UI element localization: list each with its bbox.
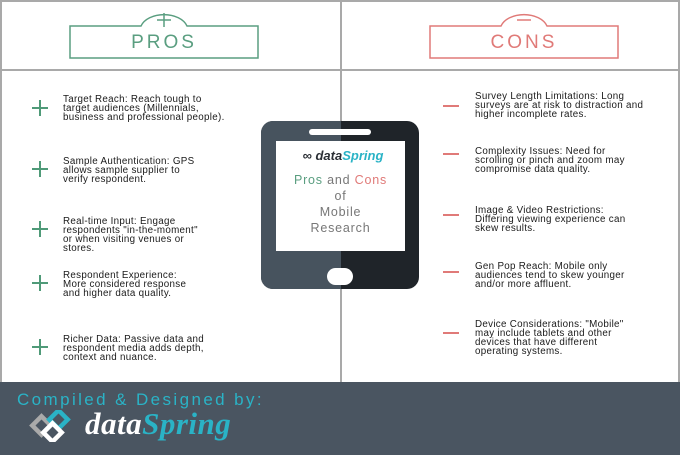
con 4: and/or more affluent. [475,279,572,290]
con 2 [443,146,625,175]
header: pros: PROS [131,32,197,53]
pro 2: Sample Authentication: GPS [63,156,194,167]
screen title: Mobile [320,205,361,219]
con 3: skew results. [475,223,536,234]
con 1 [443,91,643,120]
pro 3: or when visiting venues or [63,234,184,245]
con 3: Differing viewing experience can [475,214,625,225]
footer [0,382,680,455]
con 3 [443,205,625,234]
pro 1: business and professional people). [63,112,225,123]
pro 5 [32,334,204,363]
pro 5: Richer Data: Passive data and [63,334,204,345]
con 5: Device Considerations: "Mobile" [475,319,624,330]
screen logo: ∞ dataSpring [303,148,383,163]
header: cons: CONS [491,32,557,53]
pro 3: respondents "in-the-moment" [63,225,198,236]
con 2: Complexity Issues: Need for [475,146,606,157]
con 5: operating systems. [475,346,563,357]
screen title: Research [311,221,370,235]
con 1: higher incomplete rates. [475,109,587,120]
phone [261,121,419,289]
header: pros [69,13,259,59]
pro 4: More considered response [63,279,186,290]
pro 3 [32,216,198,254]
pro 3: stores. [63,243,95,254]
screen title [294,173,387,235]
pro 4: and higher data quality. [63,288,171,299]
pro 4 [32,270,186,299]
con 5 [443,319,624,357]
header: cons [429,14,619,59]
pro 4: Respondent Experience: [63,270,177,281]
pro 2: allows sample supplier to [63,165,180,176]
con 2: scrolling or pinch and zoom may [475,155,625,166]
pro 2: verify respondent. [63,174,146,185]
pro 1 [32,94,225,123]
screen title: of [334,189,347,203]
pro 1: Target Reach: Reach tough to [63,94,202,105]
con 3: Image & Video Restrictions: [475,205,604,216]
con 4: Gen Pop Reach: Mobile only [475,261,608,272]
footer logo: dataSpring [85,406,231,441]
con 1: Survey Length Limitations: Long [475,91,624,102]
screen title: Pros and Cons [294,173,387,187]
con 2: compromise data quality. [475,164,590,175]
pro 3: Real-time Input: Engage [63,216,176,227]
con 5: devices that have different [475,337,597,348]
pro 5: respondent media adds depth, [63,343,204,354]
phone screen [276,141,405,251]
con 4 [443,261,625,290]
con 4: audiences tend to skew younger [475,270,625,281]
con 1: surveys are at risk to distraction and [475,100,643,111]
footer credit: Compiled & Designed by: [17,390,264,409]
pro 5: context and nuance. [63,352,157,363]
pro 1: target audiences (Millennials, [63,103,199,114]
pros list [32,94,225,363]
cons list [443,91,643,357]
pro 2 [32,156,194,185]
con 5: may include tablets and other [475,328,612,339]
